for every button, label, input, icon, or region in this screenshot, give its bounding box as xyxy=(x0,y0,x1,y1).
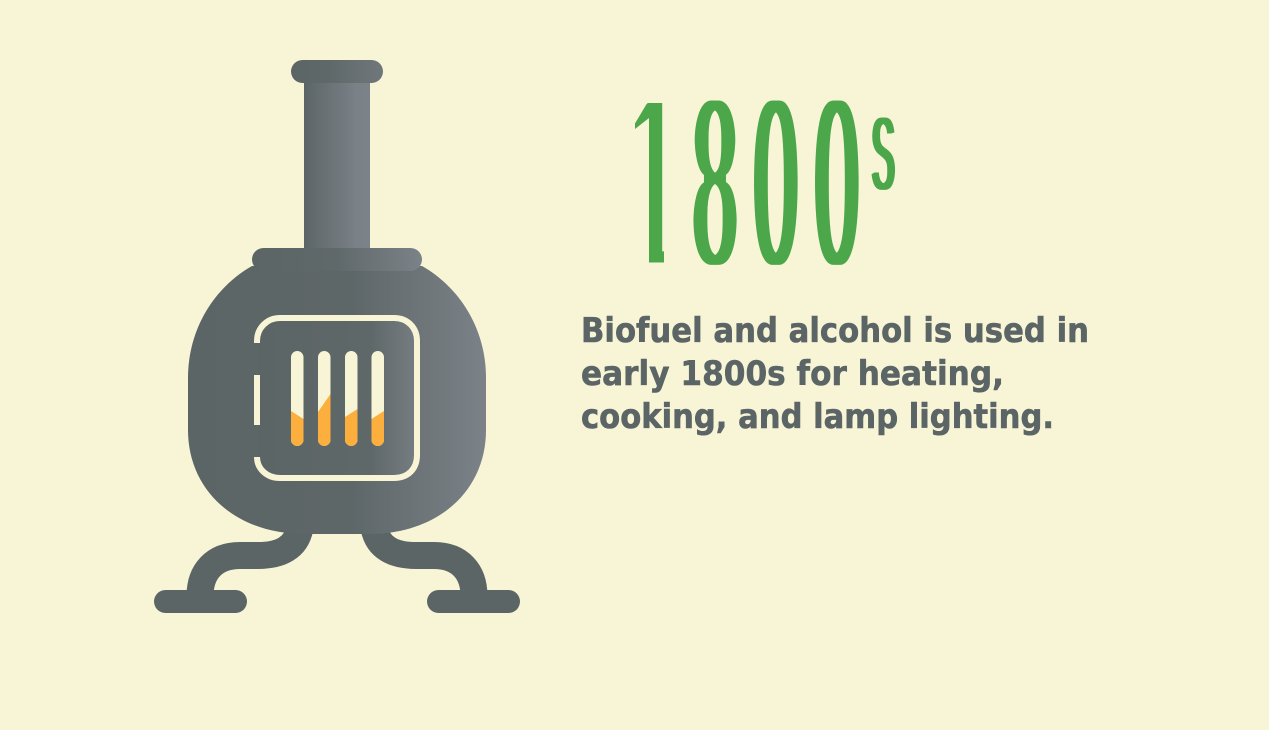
door window xyxy=(258,318,417,478)
description text: cooking, and lamp lighting. xyxy=(581,397,1054,436)
description text: Biofuel and alcohol is used in xyxy=(581,311,1089,350)
flames xyxy=(291,394,384,446)
heading: 1800s xyxy=(635,100,896,265)
stove legs xyxy=(200,528,474,596)
stove feet xyxy=(154,590,520,613)
door grate bars xyxy=(291,351,384,446)
stove top plate xyxy=(252,248,422,271)
stove body xyxy=(188,266,486,534)
heading: 1800s: s xyxy=(872,65,895,220)
heading: 1800s: 0 xyxy=(754,48,797,319)
chimney cap xyxy=(291,60,383,83)
icon: stove xyxy=(154,60,520,613)
heading: 1800s: 1 xyxy=(625,49,680,318)
heading: 1800s: 8 xyxy=(694,48,737,319)
description text: early 1800s for heating, xyxy=(581,354,1004,393)
stove chimney xyxy=(304,72,370,252)
description text xyxy=(581,311,1089,436)
heading: 1800s: 0 xyxy=(816,48,858,319)
door frame xyxy=(257,318,417,478)
stove door xyxy=(257,318,417,478)
